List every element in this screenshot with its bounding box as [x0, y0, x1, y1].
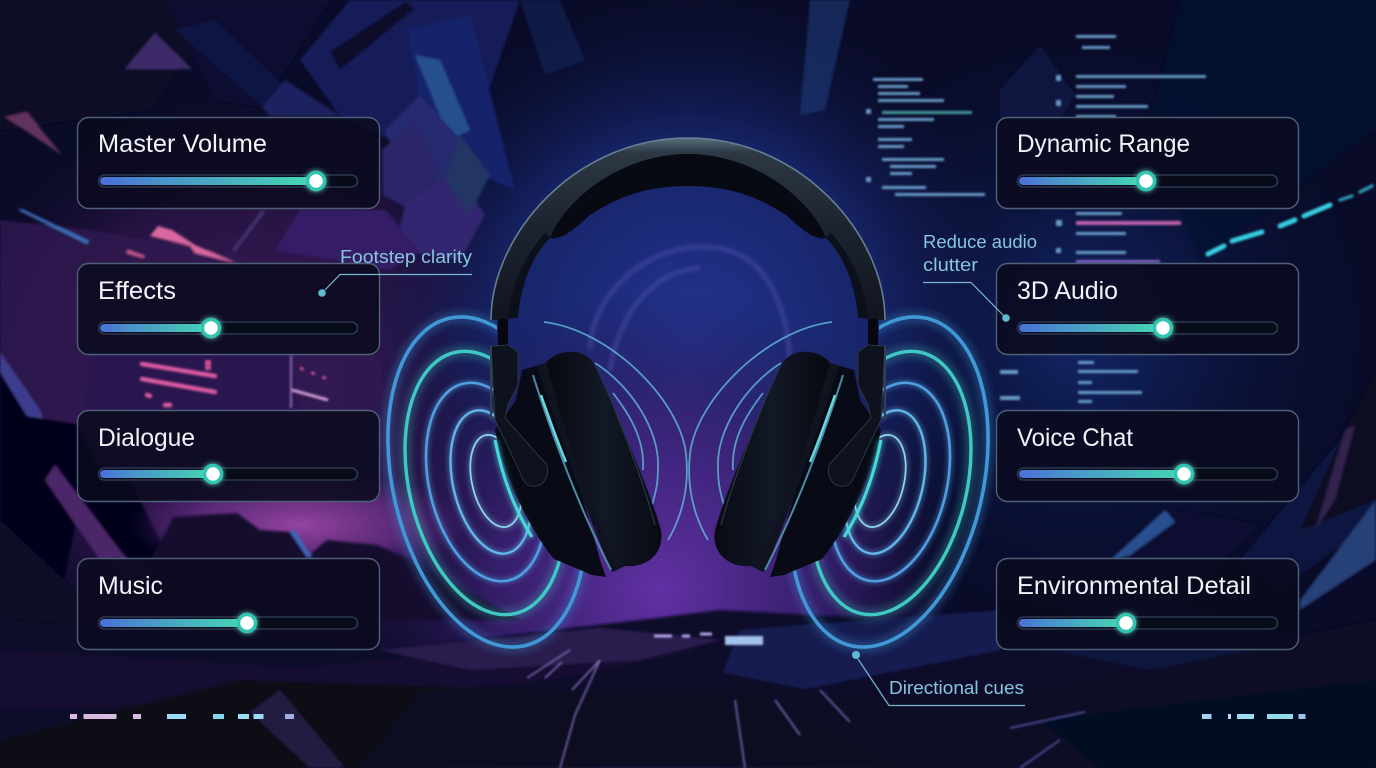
footer dashes: right — [1202, 714, 1306, 719]
cyan data streak — [1208, 186, 1372, 254]
callout: Directional cues: Directional cues — [889, 678, 1024, 698]
left ear cup — [491, 319, 662, 577]
footer dashes: left — [70, 714, 294, 719]
pink debris — [142, 355, 330, 408]
faint arch — [590, 247, 790, 375]
panel: 3D Audio: 3D Audio — [1017, 277, 1118, 305]
floating code lines — [866, 35, 1206, 403]
panel: Dialogue — [78, 410, 380, 502]
callout: Footstep clarity — [318, 247, 472, 297]
panel: 3D Audio — [996, 264, 1298, 354]
callout: Reduce audio clutter: Reduce audio — [923, 232, 1037, 252]
panel: Effects: Effects — [98, 277, 176, 305]
panel: Effects — [78, 264, 380, 354]
callout: Reduce audio clutter: clutter — [923, 255, 978, 275]
right ear cup — [714, 319, 885, 577]
panel: Voice Chat: Voice Chat — [1017, 424, 1133, 452]
headphones — [491, 138, 885, 577]
headband — [491, 138, 885, 320]
panel: Voice Chat — [996, 410, 1298, 502]
panel: Master Volume — [78, 118, 380, 208]
callout: Footstep clarity: Footstep clarity — [340, 247, 472, 267]
panel: Master Volume: Master Volume — [98, 130, 267, 158]
panel: Music: Music — [98, 572, 163, 600]
ground light sliver — [527, 634, 1085, 768]
panel: Dialogue: Dialogue — [98, 424, 195, 452]
panel: Music — [78, 558, 380, 650]
panel: Environmental Detail: Environmental Detail — [1017, 572, 1251, 600]
sound waves: right — [688, 308, 996, 656]
sound waves: left — [380, 308, 688, 656]
panel: Dynamic Range — [996, 118, 1298, 208]
panel: Environmental Detail — [996, 558, 1298, 650]
callout: Directional cues — [852, 651, 1025, 706]
callout: Reduce audio clutter — [923, 232, 1037, 322]
panel: Dynamic Range: Dynamic Range — [1017, 130, 1190, 158]
